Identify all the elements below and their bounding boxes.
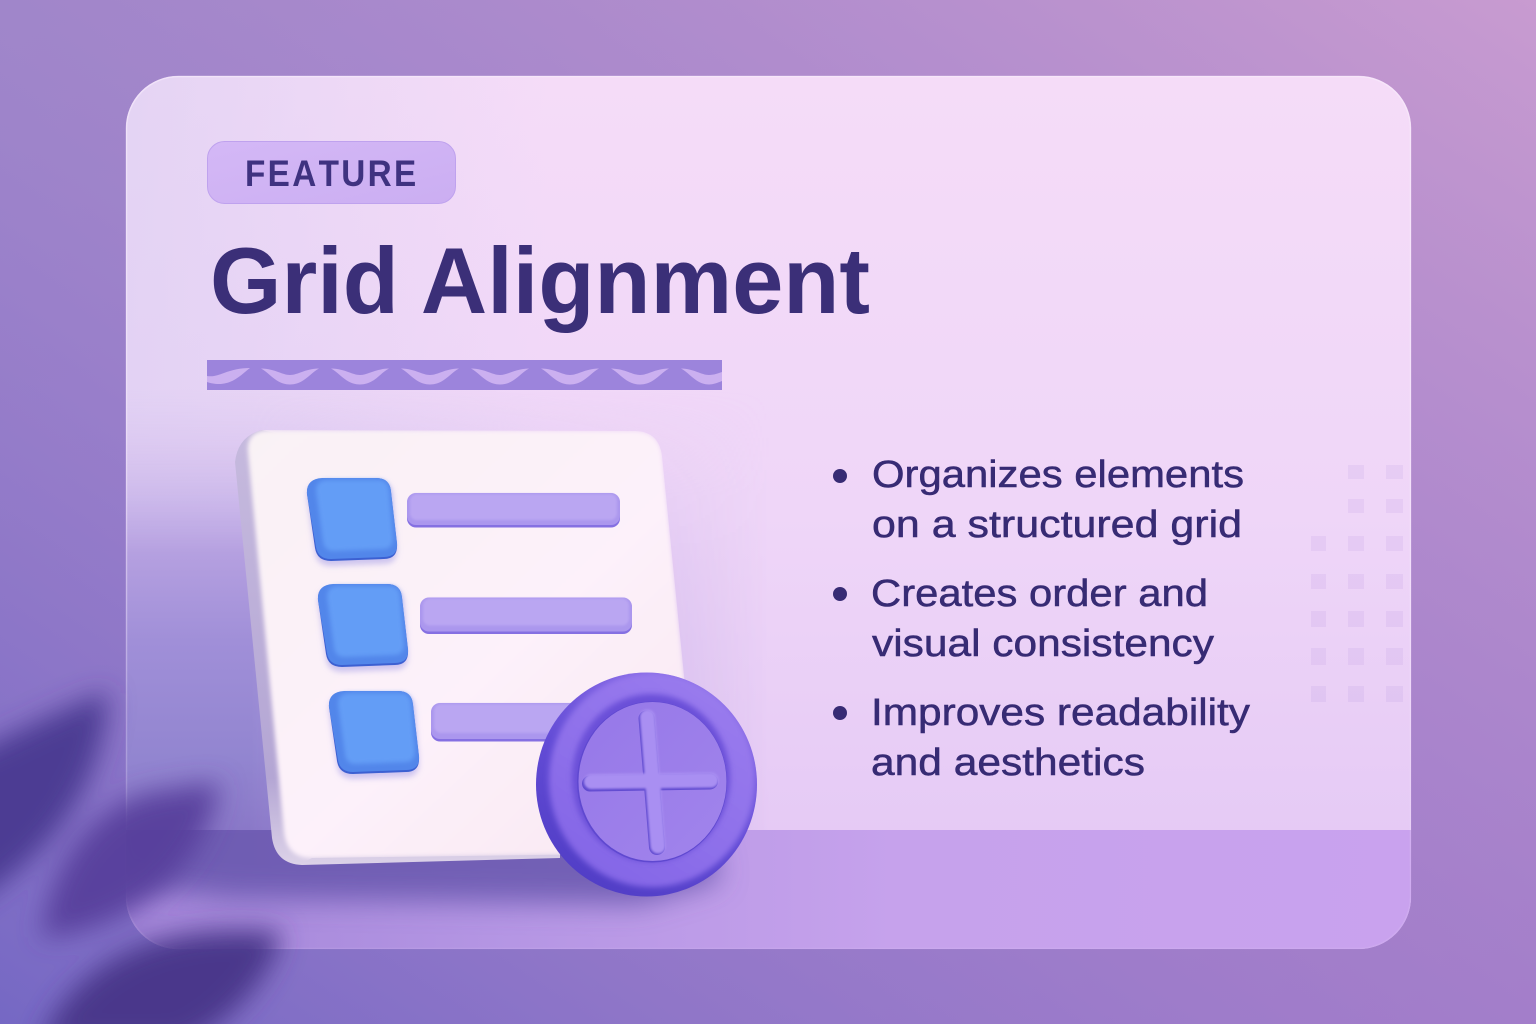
badge: FEATURE: FEATURE — [245, 153, 419, 194]
coin body — [536, 672, 757, 896]
wavy divider — [207, 360, 722, 390]
coin inner disc — [577, 702, 727, 862]
bullet 2: Creates order and — [871, 573, 1208, 615]
bullet 2: visual consistency — [872, 623, 1214, 665]
bullet 3 — [833, 692, 1250, 784]
badge: FEATURE — [208, 142, 456, 204]
blurred foliage — [0, 692, 282, 1024]
bullet 3: and aesthetics — [871, 742, 1145, 784]
paper front face — [248, 430, 700, 858]
panel: main card — [126, 76, 1411, 949]
coin rim — [549, 673, 755, 887]
paper side edge — [235, 430, 560, 865]
bullet 3: Improves readability — [871, 692, 1250, 734]
leaf 3 — [40, 930, 282, 1024]
bullet 1: Organizes elements — [872, 454, 1244, 496]
leaf 2 — [42, 784, 220, 938]
coin recess shadow — [572, 694, 730, 862]
icon: plus coin — [536, 672, 757, 896]
plus sign — [590, 717, 711, 847]
bullet 2 — [833, 573, 1214, 665]
checklist row 2 — [318, 584, 632, 672]
decorative dot grid — [1311, 465, 1403, 702]
leaf 1 — [0, 692, 108, 910]
title: Grid Alignment — [210, 228, 870, 333]
bullet 1: on a structured grid — [872, 504, 1242, 546]
checklist row 1 — [307, 478, 620, 566]
checklist row 3 — [329, 691, 594, 779]
bullet 1 — [833, 454, 1244, 546]
floor shadow under paper — [152, 830, 732, 920]
bullet list — [833, 454, 1250, 784]
icon: checklist paper — [235, 430, 700, 865]
